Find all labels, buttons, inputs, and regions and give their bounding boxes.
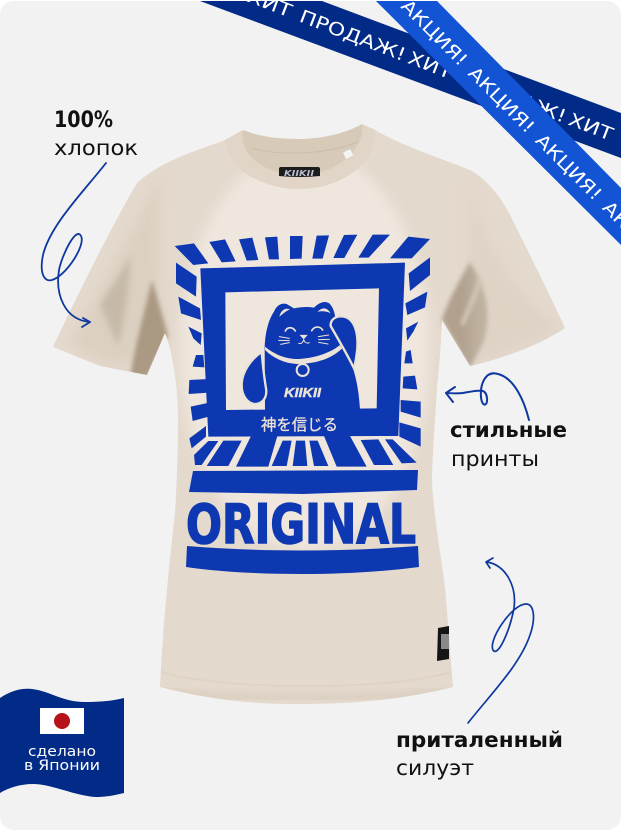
- t-shirt: [53, 124, 565, 704]
- ribbon: bestseller: ХИТ: [405, 48, 456, 84]
- ribbon: sale: АКЦИЯ!: [531, 130, 606, 205]
- neck label: KIIKII: [284, 169, 314, 178]
- sun rays and frame: [175, 235, 430, 467]
- collar: [225, 124, 375, 189]
- size tag: [343, 149, 353, 159]
- label: fitted silhouette: приталенный: [396, 728, 563, 753]
- label: 100% cotton: хлопок: [54, 136, 138, 161]
- label: fitted silhouette: [396, 728, 563, 781]
- badge text: сделано: [28, 744, 96, 760]
- flag ribbon: [0, 689, 124, 797]
- neck label: [279, 167, 320, 178]
- arrow: to sleeve: [42, 163, 106, 327]
- ribbon: sale: [376, 1, 621, 245]
- badge: made in japan: [0, 689, 124, 797]
- ribbon: sale: АКЦИЯ!: [464, 63, 539, 138]
- brand logo on print: KIIKII: [284, 385, 321, 400]
- label: 100% cotton: [54, 108, 138, 161]
- label: fitted silhouette: силуэт: [396, 756, 474, 781]
- ribbon: bestseller: [200, 1, 621, 158]
- maneki-neko cat: [242, 302, 360, 411]
- top stripe: [189, 470, 418, 494]
- bottom stripe: [186, 546, 419, 574]
- badge text: в Японии: [24, 758, 100, 774]
- side label: [437, 626, 449, 661]
- arrow: to print: [446, 373, 529, 420]
- label: stylish prints: стильные: [450, 418, 567, 443]
- japan flag icon: [40, 708, 84, 734]
- label: stylish prints: принты: [451, 447, 539, 472]
- label: 100% cotton: 100%: [54, 108, 113, 133]
- ribbon: bestseller: ХИТ: [565, 109, 617, 146]
- ribbon: bestseller: ПРОДАЖ!: [296, 6, 409, 66]
- print graphic: [175, 235, 430, 574]
- japanese slogan: 神を信じる: [261, 416, 338, 434]
- badge text: [24, 744, 100, 774]
- ribbons: [200, 1, 621, 245]
- ribbon: bestseller: ПРОДАЖ!: [457, 68, 569, 128]
- arrow: to hem: [468, 558, 533, 723]
- original wordmark: ORIGINAL: [186, 493, 416, 556]
- label: stylish prints: [450, 418, 567, 472]
